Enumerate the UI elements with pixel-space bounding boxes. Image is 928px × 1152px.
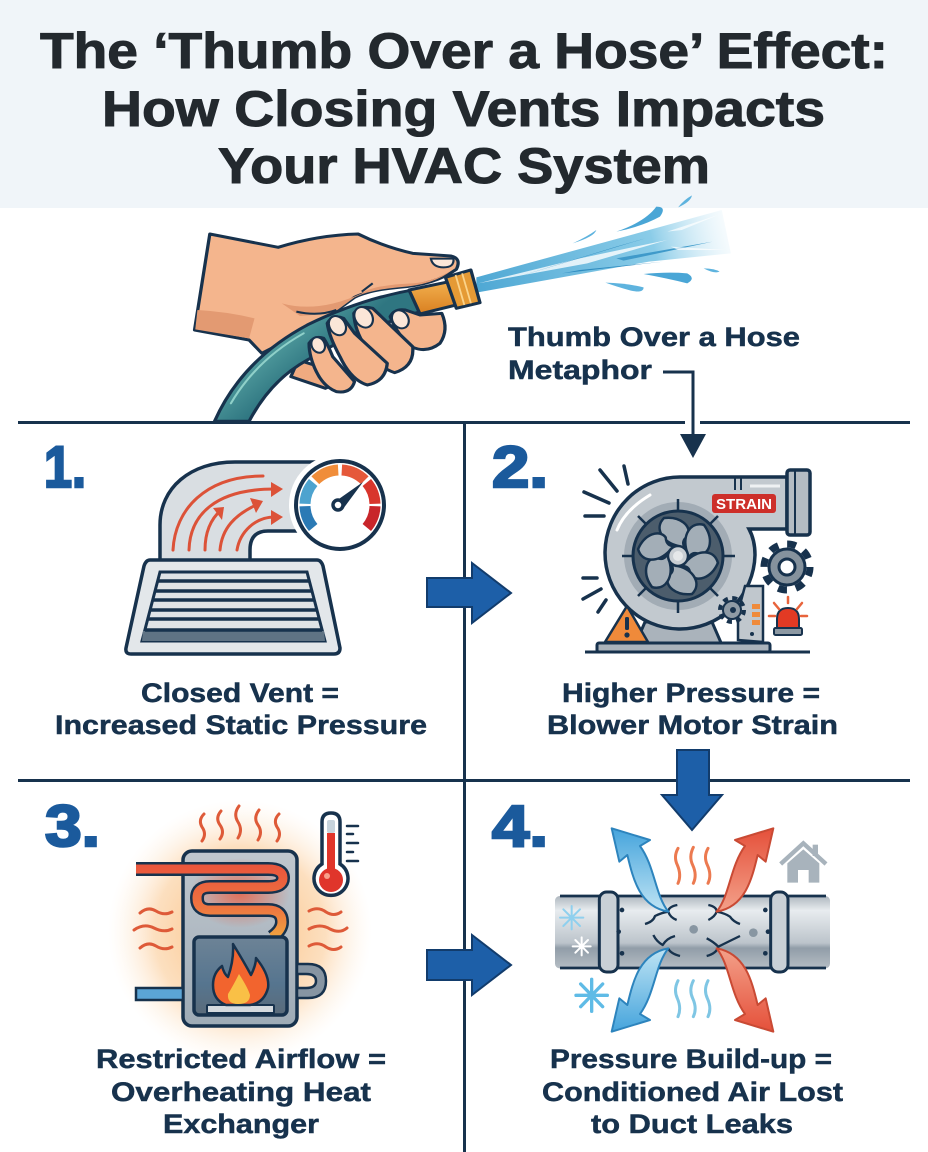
- alarm beacon: [769, 597, 807, 635]
- duct elbow: [160, 462, 325, 562]
- heat glow: [108, 800, 372, 1064]
- caption: closed vent: Closed Vent =: [141, 678, 339, 708]
- caption: higher pressure: [547, 678, 838, 740]
- title banner: [0, 0, 928, 208]
- arrow: step 3 to step 4: [427, 935, 511, 995]
- warning triangle: [605, 606, 648, 642]
- heat waves: [134, 806, 347, 950]
- cold return pipe: [136, 964, 326, 1000]
- caption: thumb over a hose metaphor: Thumb Over a Hose: [508, 322, 800, 352]
- caption: thumb over a hose metaphor: Metaphor: [508, 355, 653, 385]
- caption: thumb over a hose metaphor: [508, 322, 800, 385]
- snowflakes: [560, 906, 607, 1011]
- title banner: Your HVAC System: [218, 138, 710, 194]
- house icon: [781, 843, 826, 883]
- number 3: 3.: [45, 794, 100, 859]
- icon: overheating heat exchanger: [108, 800, 372, 1064]
- caption: higher pressure: Blower Motor Strain: [547, 710, 838, 740]
- number 4: 4.: [492, 794, 548, 859]
- duct pipe: [555, 892, 830, 972]
- airflow arrows: [173, 476, 275, 550]
- caption: restricted airflow: Overheating Heat: [111, 1077, 371, 1107]
- cracks: [645, 905, 740, 956]
- caption: closed vent: Increased Static Pressure: [55, 710, 427, 740]
- icon: blower motor under strain: [583, 466, 810, 652]
- hose: [215, 289, 420, 421]
- brass nozzle: [409, 282, 456, 314]
- number 1: 1.: [44, 435, 86, 500]
- caption: pressure build-up: Pressure Build-up =: [550, 1044, 832, 1074]
- base: [635, 622, 722, 645]
- grid divider lines: [18, 422, 910, 1152]
- arrow: step 2 to step 4: [662, 750, 722, 830]
- caption: closed vent: [55, 678, 427, 740]
- water spray: [476, 195, 731, 293]
- strain lines: [583, 466, 628, 612]
- cold air leak arrows: [612, 828, 668, 1032]
- fan wheel: [622, 499, 735, 613]
- title banner: How Closing Vents Impacts: [102, 81, 825, 137]
- thermometer: [314, 813, 358, 895]
- title banner: The ‘Thumb Over a Hose’ Effect:: [40, 23, 888, 79]
- flame: [213, 944, 268, 1005]
- arrow: step 1 to step 2: [427, 563, 511, 623]
- outlet flange: [787, 470, 810, 535]
- hot air leak arrows: [717, 828, 773, 1032]
- caption: restricted airflow: [96, 1044, 386, 1139]
- gauge: [289, 454, 391, 556]
- caption: pressure build-up: to Duct Leaks: [591, 1109, 793, 1139]
- hand and wrist: [195, 234, 458, 353]
- large gear: [764, 544, 810, 590]
- vent grille: [126, 560, 340, 654]
- caption: pressure build-up: Conditioned Air Lost: [542, 1077, 843, 1107]
- icon: closed vent with pressure gauge: [126, 454, 391, 654]
- exchanger body: [183, 851, 297, 1026]
- firebox: [194, 937, 287, 1015]
- fingers: [309, 307, 445, 392]
- housing: [605, 477, 787, 629]
- caption: pressure build-up: [542, 1044, 843, 1139]
- strain badge: STRAIN: [716, 497, 772, 513]
- caption: higher pressure: Higher Pressure =: [562, 678, 820, 708]
- palm behind hose: [291, 360, 351, 388]
- heat waves: [675, 847, 710, 883]
- fingernails: [309, 259, 454, 355]
- small damaged gear: [720, 598, 744, 622]
- number 2: 2.: [492, 435, 548, 500]
- heating coil: [136, 869, 283, 937]
- arrow: metaphor to step 2: [663, 372, 706, 458]
- cool waves: [675, 981, 710, 1017]
- control panel: [738, 586, 763, 642]
- caption: restricted airflow: Restricted Airflow =: [96, 1044, 386, 1074]
- caption: restricted airflow: Exchanger: [163, 1109, 320, 1139]
- icon: hand gripping hose with water spray: [195, 195, 731, 421]
- icon: leaking duct: [555, 828, 830, 1032]
